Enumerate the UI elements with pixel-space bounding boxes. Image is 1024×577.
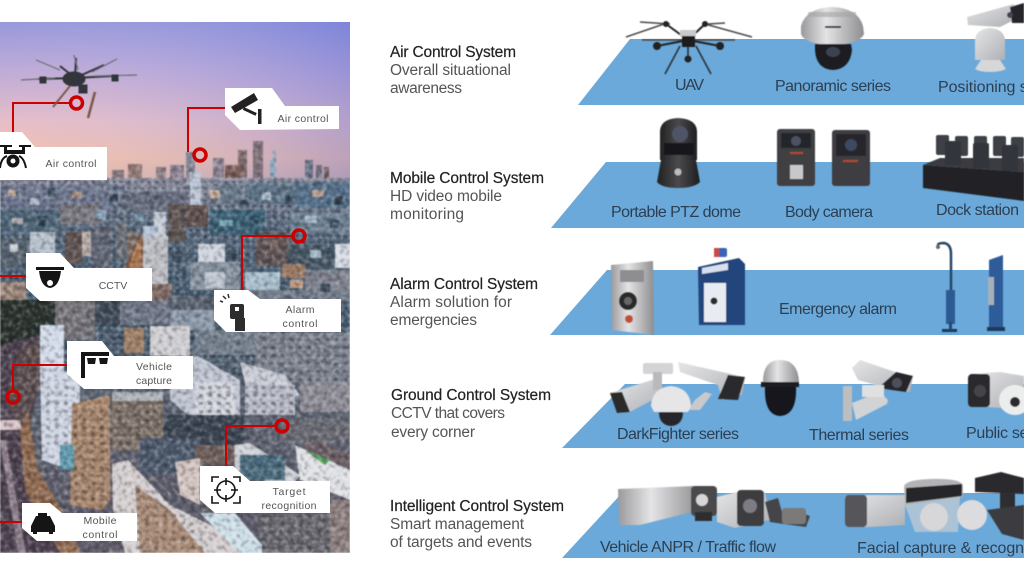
cityscape: [0, 141, 350, 553]
text block: air control system: awareness: [390, 80, 462, 97]
icon: alarm button: [220, 294, 245, 331]
icon: public series cameras: [968, 372, 1024, 415]
icon: dock station: [923, 135, 1024, 201]
text block: intelligent control system: of targets and events: [390, 534, 532, 551]
icon: thermal camera: [843, 360, 913, 421]
product labels: Dock station: [936, 202, 1019, 219]
small scattered buildings: [8, 188, 343, 292]
icon: DarkFighter cameras: [610, 362, 745, 426]
icon: positioning camera: [967, 3, 1024, 72]
product labels: UAV: [675, 77, 704, 94]
panel: city photo: [0, 22, 350, 553]
icon: vehicle capture: [81, 352, 109, 378]
callout: vehicle capture: Vehicle: [136, 361, 172, 373]
icon: dome camera: [36, 267, 64, 288]
callout: vehicle capture: [67, 341, 193, 389]
callout: air control camera: Air control: [278, 113, 328, 125]
icon: vehicle ANPR cameras: [618, 486, 810, 528]
mid right white blocks: [140, 356, 350, 473]
panel: blue platforms: [550, 39, 1024, 558]
icon: police car: [31, 513, 55, 534]
icon: facial capture cameras: [845, 472, 1024, 540]
callout: mobile control: control: [82, 529, 118, 541]
callout: air control drone: Air control: [46, 158, 96, 170]
foreground dark area: [0, 300, 350, 382]
text block: alarm control system: Alarm solution for: [390, 294, 512, 311]
text block: air control system: Air Control System: [390, 44, 516, 61]
callout: CCTV: [26, 253, 152, 301]
text block: mobile control system: [390, 170, 544, 223]
product labels: [600, 77, 1024, 557]
callout: alarm control: control: [282, 318, 318, 330]
leader lines: [0, 103, 293, 522]
callout: target recognition: Target: [272, 486, 306, 498]
icon: body cameras: [777, 129, 870, 186]
distant skyline towers: [111, 140, 330, 179]
text block: intelligent control system: [390, 498, 564, 551]
product labels: Body camera: [785, 204, 873, 221]
product labels: Panoramic series: [775, 78, 891, 95]
callout: target recognition: [200, 466, 330, 513]
text block: ground control system: CCTV that covers: [391, 405, 505, 422]
text block: alarm control system: [390, 276, 538, 329]
icon: target reticle: [212, 477, 240, 503]
callout: CCTV: CCTV: [99, 280, 127, 292]
product labels: DarkFighter series: [617, 426, 739, 443]
icon: alarm post: [987, 255, 1005, 331]
icon: drone: [0, 145, 31, 168]
callout: air control camera: [225, 88, 339, 130]
callout: mobile control: [22, 503, 137, 541]
icon: emergency call box: [698, 248, 745, 325]
icon: portable PTZ dome: [657, 118, 700, 188]
road left: [0, 335, 80, 553]
callout: mobile control: Mobile: [84, 515, 117, 527]
sky: [0, 22, 350, 182]
text block: alarm control system: Alarm Control System: [390, 276, 538, 293]
icon: panoramic camera: [801, 7, 864, 70]
lower centre big building: [112, 458, 262, 553]
lower right houses: [234, 420, 350, 553]
text block: ground control system: [391, 387, 551, 441]
white tall building: [40, 325, 80, 470]
callout: alarm control: [214, 290, 341, 332]
text block: mobile control system: HD video mobile: [390, 188, 502, 205]
product labels: Portable PTZ dome: [611, 204, 741, 221]
text block: ground control system: every corner: [391, 424, 475, 441]
icon: alarm pole: [936, 243, 957, 332]
text block: ground control system: Ground Control System: [391, 387, 551, 404]
callout: vehicle capture: capture: [136, 375, 172, 387]
tan tower: [60, 395, 110, 510]
text block: mobile control system: monitoring: [390, 206, 464, 223]
callout: target recognition: recognition: [262, 500, 317, 512]
callout: alarm control: Alarm: [286, 304, 315, 316]
marker rings: [7, 97, 305, 432]
mid-distance buildings: [0, 172, 350, 318]
icon: bullet camera: [231, 93, 262, 124]
icon: alarm panel: [611, 261, 654, 335]
text block: air control system: [390, 44, 516, 97]
photo drone: [21, 55, 137, 118]
icon: silver PTZ dome: [761, 360, 799, 416]
text block: intelligent control system: Intelligent Control System: [390, 498, 564, 515]
icon: UAV product: [626, 21, 752, 74]
product labels: Vehicle ANPR / Traffic flow: [600, 539, 776, 556]
text block: air control system: Overall situational: [390, 62, 511, 79]
callout: air control drone: [0, 132, 107, 180]
product labels: Emergency alarm: [779, 301, 897, 318]
text block: mobile control system: Mobile Control System: [390, 170, 544, 187]
city base: [0, 178, 350, 553]
text block: intelligent control system: Smart management: [390, 516, 525, 533]
brown block: [112, 392, 163, 450]
text block: alarm control system: emergencies: [390, 312, 477, 329]
product labels: Thermal series: [809, 427, 909, 444]
